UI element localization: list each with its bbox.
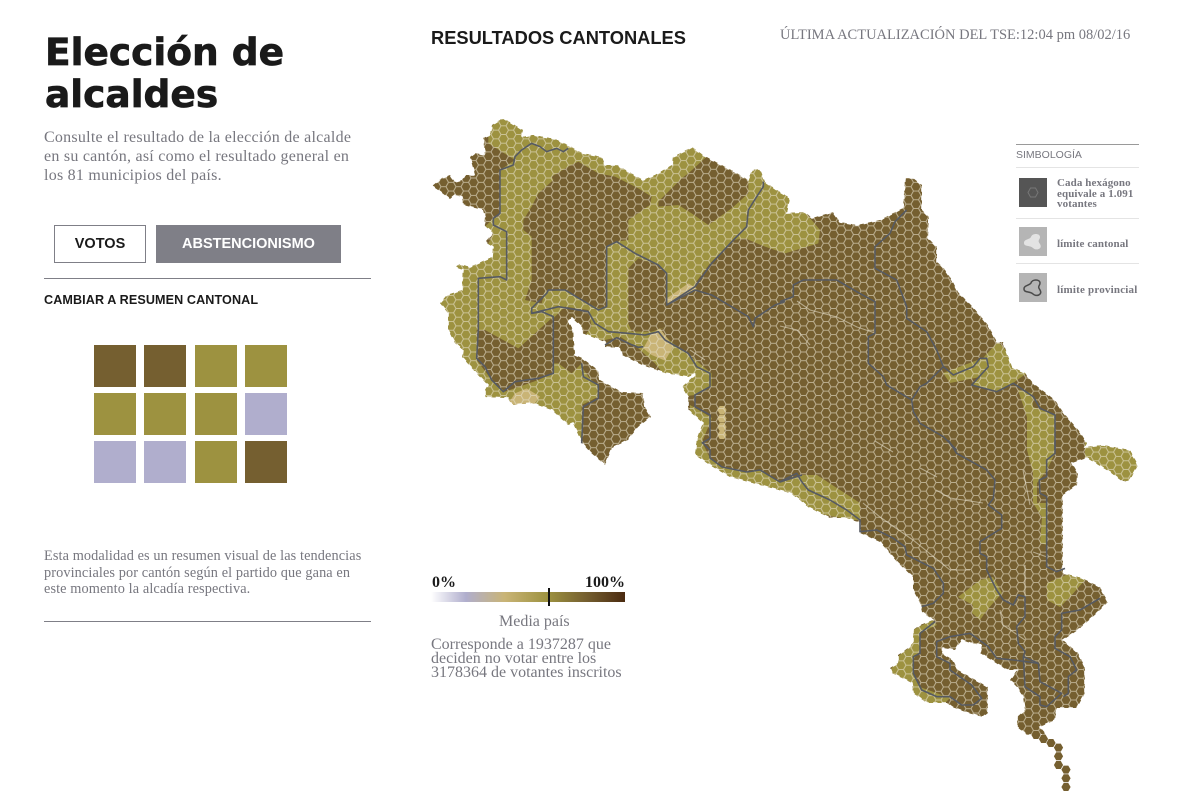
title: alcaldes [45, 72, 218, 116]
region: brown northeast block [658, 157, 748, 225]
region: brown Nicoya column [553, 307, 592, 373]
button: abstencionismo [156, 225, 341, 263]
national mean tick [548, 588, 550, 606]
abstention note: deciden no votar entre los [431, 650, 596, 667]
region: east and south olive cantons [690, 342, 1140, 705]
link: cambiar a resumen cantonal: CAMBIAR A RESUMEN CANTONAL [44, 293, 258, 307]
region: central brown canton [523, 162, 652, 308]
region: brown southwest block [477, 317, 553, 392]
button: abstencionismo: ABSTENCIONISMO [182, 236, 315, 252]
map fill regions clipped to country shape [420, 100, 1150, 750]
text: cada hexágono: votantes [1057, 198, 1097, 210]
intro paragraph [44, 129, 351, 184]
region: north and west olive cantons [438, 113, 820, 440]
southern tail of hexagons [1031, 731, 1071, 791]
intro paragraph: los 81 municipios del país. [44, 167, 222, 184]
color scale legend [431, 574, 625, 681]
heading: resultados cantonales: RESULTADOS CANTONALES [431, 27, 686, 48]
intro paragraph: Consulte el resultado de la elección de alcalde [44, 129, 351, 146]
abstention note: 3178364 de votantes inscritos [431, 664, 622, 681]
text: cada hexágono: equivale a 1.091 [1057, 188, 1133, 200]
divider line top [44, 278, 371, 279]
text: cada hexágono: Cada hexágono [1057, 177, 1131, 189]
media país label: Media país [499, 613, 570, 630]
explanatory paragraph [44, 548, 361, 597]
text: límite cantonal: límite cantonal [1057, 238, 1128, 250]
explanatory paragraph: provinciales por cantón según el partido que gana en [44, 564, 350, 580]
intro paragraph: en su cantón, así como el resultado general en [44, 148, 349, 165]
gradient bar [431, 592, 625, 602]
last update note: ÚLTIMA ACTUALIZACIÓN DEL TSE:12:04 pm 08/02/16 [780, 27, 1130, 43]
scale label 0%: 0% [432, 574, 456, 591]
hexagon mesh [420, 100, 1150, 750]
divider line bottom [44, 621, 371, 622]
text: cada hexágono [1057, 177, 1133, 210]
province summary squares [94, 345, 287, 483]
button: votos: VOTOS [75, 236, 125, 252]
legend: simbología [1016, 144, 1139, 302]
abstention note: Corresponde a 1937287 que [431, 636, 611, 653]
title: Elección de [45, 30, 284, 74]
cantonal lines [690, 301, 1047, 640]
icon: provincial limit [1019, 273, 1047, 302]
title [45, 30, 284, 116]
map: hexagon cartogram of Costa Rica [432, 119, 1138, 791]
icon: hexagon [1019, 178, 1047, 207]
region: tan cantons [508, 283, 697, 405]
edge notches imitating hexagon outline [432, 118, 1138, 735]
text: límite provincial: límite provincial [1057, 284, 1138, 296]
region: brown canton right of strip [628, 258, 667, 332]
explanatory paragraph: Esta modalidad es un resumen visual de las tendencias [44, 548, 361, 564]
icon: cantonal limit [1019, 227, 1047, 256]
tan hexagon column [717, 406, 727, 439]
button: votos [54, 225, 146, 263]
scale label 100%: 100% [585, 574, 625, 591]
provincial borders [477, 143, 1100, 707]
abstention note [431, 636, 622, 681]
legend heading: SIMBOLOGÍA [1016, 149, 1082, 161]
explanatory paragraph: este momento la alcadía respectiva. [44, 581, 250, 597]
